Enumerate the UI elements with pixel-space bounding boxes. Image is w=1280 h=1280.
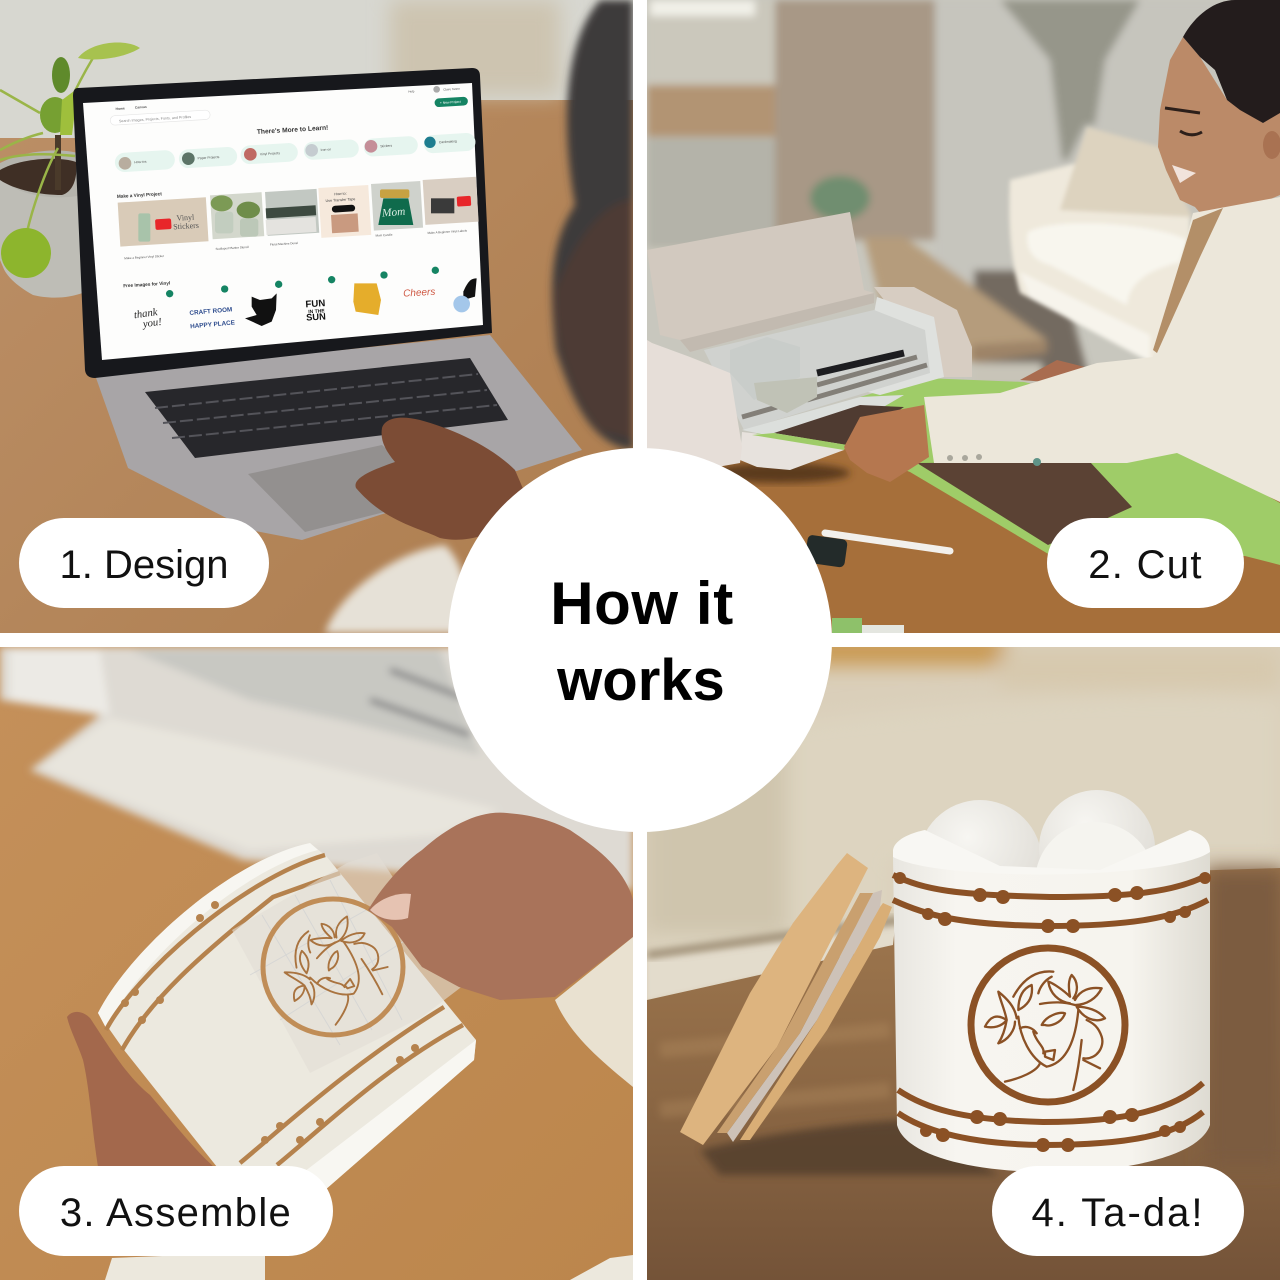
cuff buttons (947, 454, 1041, 466)
laptop screen: Home (115, 106, 125, 111)
laptop screen bezel (73, 68, 492, 378)
portrait emblem (985, 971, 1105, 1090)
laptop screen: Cheers (403, 287, 436, 300)
circle emblem (263, 899, 403, 1035)
laptop screen: Scalloped Planter Stencil (215, 245, 249, 251)
laptop screen: Mom (381, 206, 406, 220)
keyboard (145, 358, 508, 458)
panel: step 3 assemble photo (0, 647, 633, 1280)
title circle: How it works: works (557, 648, 725, 713)
pill label: 2. Cut (1047, 518, 1244, 608)
screen thumbnails (118, 197, 209, 247)
pill label: 1. Design: 1. Design (60, 543, 228, 587)
laptop screen: Search Images, Projects, Fonts, and Profiles (119, 115, 191, 123)
pill label: 4. Ta-da!: 4. Ta-da! (1032, 1191, 1204, 1235)
laptop screen: Make a Vinyl Project (117, 191, 162, 199)
person: hair (1183, 0, 1280, 123)
laptop screen: SUN (306, 311, 326, 323)
person: far hand (1020, 360, 1084, 382)
wooden lid (680, 853, 892, 1145)
panel: step 1 design photo (0, 0, 633, 633)
laptop screen: Floral Machine Decal (270, 241, 298, 247)
laptop screen: Stickers (173, 221, 199, 231)
laptop screen: Mom Candle (375, 233, 393, 238)
sofa (1009, 127, 1192, 362)
blurred machine background (0, 647, 633, 890)
brown vinyl on mat (774, 405, 904, 445)
pill label: 3. Assemble: 3. Assemble (60, 1191, 292, 1235)
laptop screen: Use Transfer Tape (325, 197, 355, 203)
person: near hand (844, 405, 929, 482)
jar bands (893, 872, 1211, 1152)
laptop screen: How to: (334, 192, 347, 196)
laptop screen: Claire Tanne (443, 87, 460, 92)
laptop screen: Vinyl Projects (260, 151, 280, 156)
laptop screen: you! (141, 317, 163, 330)
blurred room background (647, 0, 1141, 384)
pill label: 1. Design (19, 518, 269, 608)
laptop screen: Vinyl (176, 213, 195, 223)
laptop screen: How-tos (134, 160, 147, 164)
top hand peeling (368, 813, 633, 1000)
laptop screen: CRAFT ROOM (189, 306, 233, 317)
laptop screen: Help (408, 89, 415, 94)
panel: step 4 ta-da photo (647, 635, 1280, 1280)
laptop screen (83, 83, 483, 360)
pill label: 4. Ta-da! (992, 1166, 1244, 1256)
green cutting mat (752, 378, 1280, 565)
laptop screen: FUN (305, 298, 326, 310)
laptop screen: Make a Beginner Vinyl Sticker (124, 254, 164, 260)
pill label: 2. Cut: 2. Cut (1088, 543, 1203, 587)
laptop screen: Make A Beginner Vinyl Labels (427, 229, 468, 235)
potted plant (0, 43, 140, 298)
laptop screen: There's More to Learn! (257, 125, 328, 136)
laptop screen: Canvas (135, 105, 147, 110)
pill label: 3. Assemble (19, 1166, 333, 1256)
wooden table (647, 868, 1280, 1280)
laptop screen: Iron-on (320, 147, 331, 152)
wall background (0, 0, 633, 138)
jar with lotus emblem (893, 790, 1211, 1172)
laptop screen: Cardmaking (439, 139, 457, 144)
pen and phone (804, 533, 950, 633)
transfer tape (232, 863, 460, 1046)
laptop screen: + New Project (440, 100, 461, 105)
blurred room background (652, 647, 1275, 928)
trackpad (248, 445, 395, 532)
laptop screen: IN THE (308, 308, 325, 315)
portrait transfer (284, 916, 389, 1026)
laptop screen: Paper Projects (197, 155, 220, 160)
title circle: How it works: How it (550, 570, 734, 637)
person hair and shoulder (552, 0, 633, 450)
laptop screen: HAPPY PLACE (190, 319, 235, 330)
person: face (1158, 37, 1280, 225)
laptop screen: thank (133, 307, 158, 321)
title circle: How it works (448, 448, 832, 832)
panel: step 2 cut photo (647, 0, 1280, 633)
bottom hand (67, 1012, 214, 1167)
brown vinyl lower sheet (917, 462, 1132, 545)
sleeve right (555, 937, 633, 1087)
person: jacket (924, 197, 1280, 502)
hand on trackpad (355, 418, 530, 540)
sleeve (325, 545, 466, 633)
lower sleeve (105, 1256, 265, 1280)
jar on its side (98, 843, 476, 1190)
laptop screen: Free Images for Vinyl (123, 280, 170, 288)
laptop base (95, 335, 582, 540)
cutting machine (647, 212, 972, 470)
laptop screen: Stickers (380, 144, 393, 148)
wooden desk (722, 448, 1280, 633)
